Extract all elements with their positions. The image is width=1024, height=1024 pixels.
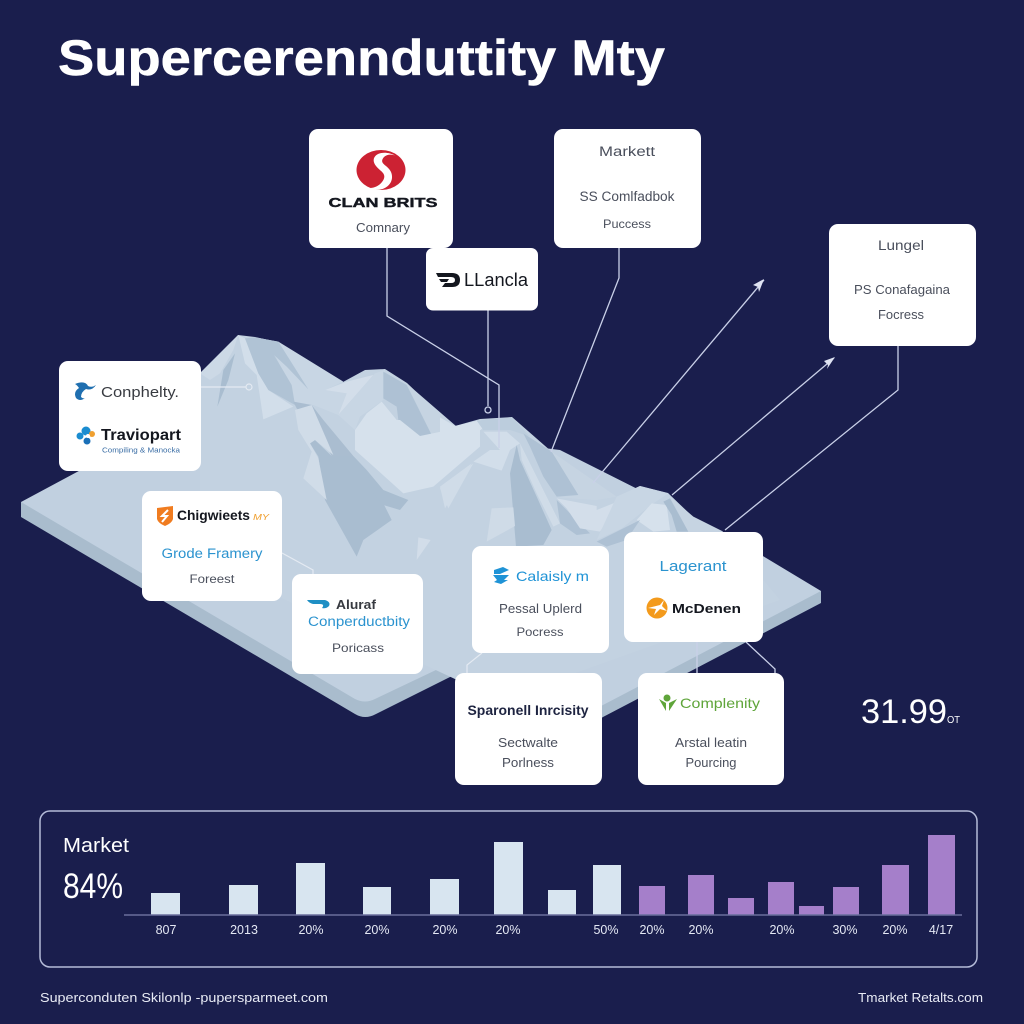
icon: green emblem [659, 694, 677, 711]
card: Sparonell [455, 673, 602, 785]
left mountain facets [200, 335, 480, 560]
brand name: LLancla [464, 270, 529, 290]
brand name: CLAN BRITS [328, 195, 438, 210]
card: Calaisly [472, 546, 609, 653]
chart label: Market [63, 835, 129, 857]
axis labels: 20% [495, 923, 521, 937]
brand name: Aluraf [336, 597, 377, 612]
brand name: Complenity [680, 695, 760, 711]
axis labels: 20% [882, 923, 908, 937]
axis labels: 20% [639, 923, 665, 937]
plate side [21, 502, 821, 745]
subheading: Pessal Uplerd [499, 602, 582, 616]
connector lines and arrows [201, 248, 898, 673]
axis labels: 807 [156, 923, 176, 937]
card: Lungel [829, 224, 976, 346]
small caption: Compiling & Manocka [102, 446, 181, 454]
heading: Markett [599, 144, 655, 159]
card: Llancla [426, 248, 538, 310]
isometric plate and mountain illustration [21, 335, 821, 745]
right mountain facets [440, 417, 723, 547]
light bars [151, 842, 621, 915]
caption: Pocress [516, 625, 564, 639]
subheading: Arstal leatin [675, 736, 747, 750]
card: Complenity [638, 673, 784, 785]
caption: Poricass [332, 641, 384, 655]
icon: blue swirl [75, 382, 96, 400]
axis labels: 2013 [230, 923, 258, 937]
brand name: McDenen [672, 601, 741, 616]
icon: orange circle [646, 598, 668, 618]
big number callout: OT [947, 715, 960, 726]
card: Clan Brits [309, 129, 453, 248]
card: Markett [554, 129, 701, 248]
icon: orange shield [157, 506, 173, 526]
icon: blue layers [493, 567, 509, 584]
purple bars [639, 835, 955, 915]
caption: Porlness [502, 756, 554, 770]
caption: Puccess [603, 217, 651, 231]
caption: Foreest [190, 572, 235, 586]
axis labels: 20% [432, 923, 458, 937]
brand name: Chigwieets [177, 507, 250, 523]
brand name: Calaisly m [516, 568, 589, 584]
icon: blue wing [307, 600, 330, 608]
icon: blue and orange cluster [76, 426, 95, 444]
brand name: Traviopart [101, 427, 181, 444]
footer: left source: Superconduten Skilonlp -pupersparmeet.com [40, 990, 328, 1005]
big number callout: 31.99 [861, 693, 947, 731]
subheading: SS Comlfadbok [580, 189, 675, 204]
card: Aluraf [292, 574, 423, 674]
caption: Pourcing [686, 756, 737, 770]
axis labels: 20% [364, 923, 390, 937]
card: Conphelty and Traviopart [59, 361, 201, 471]
subheading: Grode Framery [162, 546, 263, 561]
icon: speed D logo [436, 273, 460, 287]
key figure: 84% [63, 867, 123, 906]
axis labels [156, 923, 953, 937]
brand name: Conphelty. [101, 384, 179, 401]
caption: Comnary [356, 221, 411, 235]
axis labels: 20% [688, 923, 714, 937]
caption: Focress [878, 308, 924, 322]
heading: Lagerant [660, 559, 726, 575]
axis labels: 50% [593, 923, 619, 937]
subheading: Sectwalte [498, 736, 558, 750]
heading: Sparonell Inrcisity [468, 703, 589, 718]
mountain silhouette [200, 335, 780, 700]
subheading: Conperductbity [308, 614, 410, 629]
title: Supercerennduttity Mty [58, 30, 665, 86]
axis labels: 20% [769, 923, 795, 937]
heading: Lungel [878, 237, 924, 253]
footer: right source: Tmarket Retalts.com [858, 990, 983, 1005]
small tag: MY [253, 513, 270, 522]
plate top [21, 406, 821, 727]
card: Chigwieets [142, 491, 282, 601]
card: Lagerant [624, 532, 763, 642]
axis labels: 4/17 [929, 923, 953, 937]
axis labels: 20% [298, 923, 324, 937]
subheading: PS Conafagaina [854, 282, 951, 297]
icon: red S logo [356, 150, 406, 190]
axis labels: 30% [832, 923, 858, 937]
panel: market bar chart [40, 811, 977, 967]
